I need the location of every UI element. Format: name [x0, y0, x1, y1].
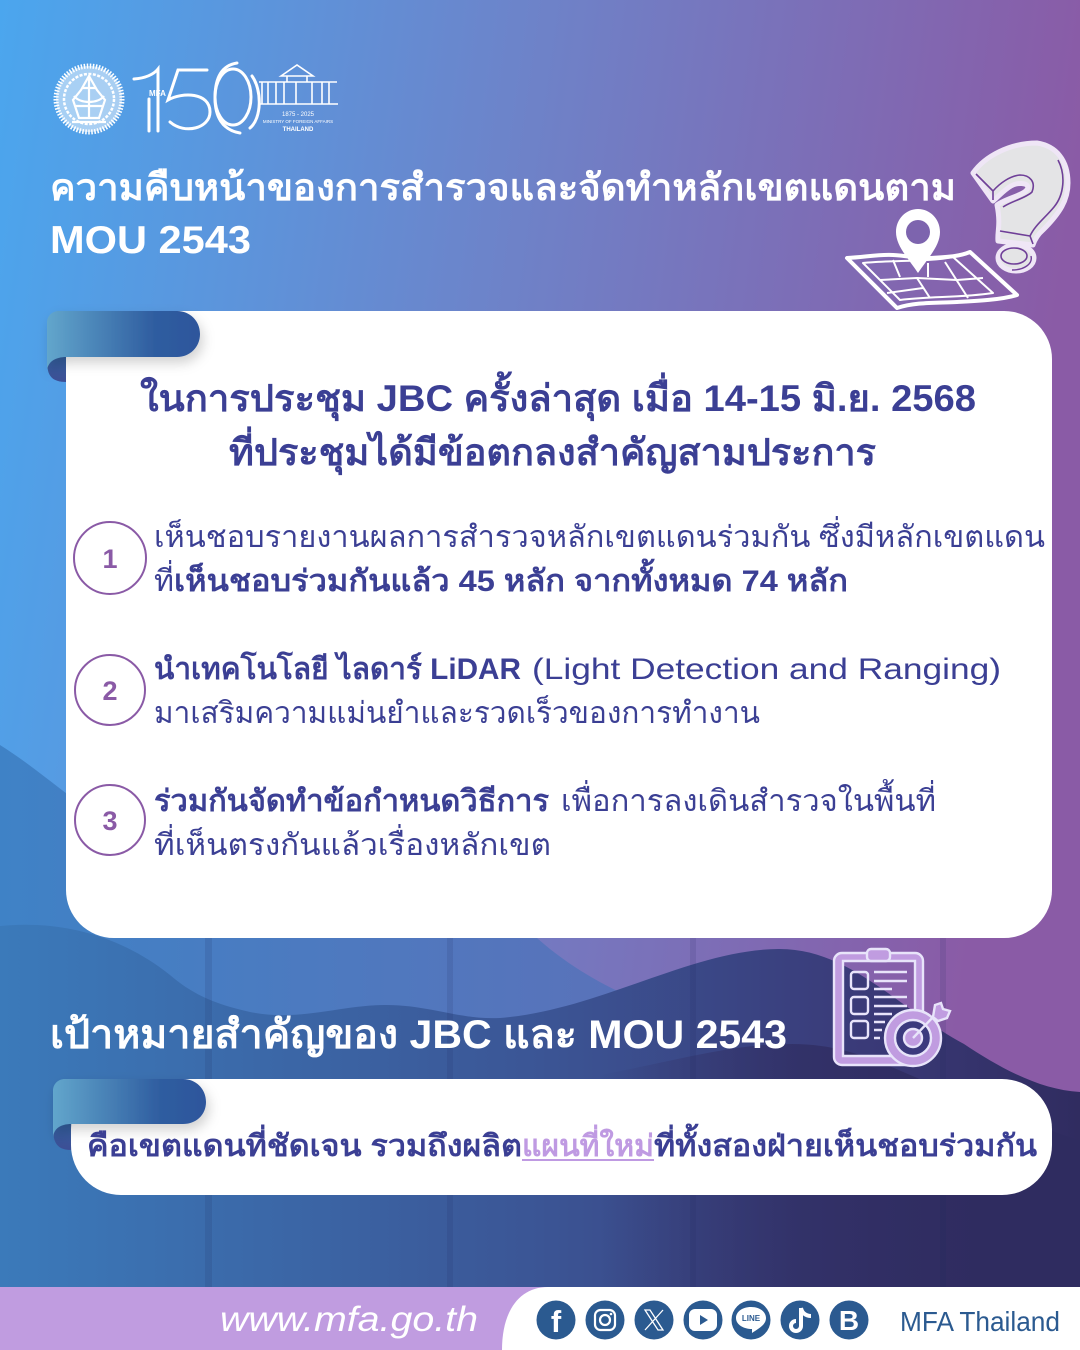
item 3 text: เพื่อการลงเดินสำรวจในพื้นที่ — [561, 779, 936, 818]
icon: clipboard with target — [834, 949, 950, 1066]
item 2 text: (Light Detection and Ranging) — [532, 653, 1001, 686]
number badge 1 — [74, 522, 146, 594]
number badge 2: 2 — [102, 676, 118, 706]
title — [50, 167, 956, 262]
number badge 2 — [75, 655, 145, 725]
item 1 text — [154, 516, 1045, 598]
number badge 3: 3 — [102, 806, 118, 836]
icon: youtube — [684, 1300, 722, 1340]
panel heading: ที่ประชุมได้มีข้อตกลงสำคัญสามประการ — [229, 426, 876, 476]
icon: line — [732, 1300, 770, 1340]
icon: X — [634, 1300, 674, 1340]
logo: MFA 150 years — [56, 63, 338, 133]
item 2 text: นำเทคโนโลยี ไลดาร์ LiDAR — [154, 650, 521, 686]
panel: JBC meeting agreements — [47, 311, 1052, 938]
logo building — [258, 65, 338, 133]
title: ความคืบหน้าของการสำรวจและจัดทำหลักเขตแดนตาม — [50, 167, 956, 208]
item 3 text: ที่เห็นตรงกันแล้วเรื่องหลักเขต — [154, 824, 551, 862]
footer bar — [0, 1287, 1080, 1350]
title: MOU 2543 — [50, 219, 251, 262]
icon: blockdit — [830, 1300, 868, 1340]
ribbon tab — [47, 311, 200, 382]
item 1 text: เห็นชอบร่วมกันแล้ว 45 หลัก จากทั้งหมด 74 หลัก — [174, 558, 848, 598]
icon: royal seal — [56, 66, 122, 132]
statement text: คือเขตแดนที่ชัดเจน รวมถึงผลิต — [87, 1124, 522, 1163]
icon: tiktok — [780, 1300, 820, 1340]
logo small MFA text: MFA — [149, 89, 166, 98]
heading: goal of JBC and MOU 2543: เป้าหมายสำคัญของ JBC และ MOU 2543 — [50, 1013, 787, 1058]
item 3 text — [154, 779, 936, 862]
logo building: 1875 - 2025 — [282, 112, 315, 118]
logo building: THAILAND — [283, 127, 314, 133]
website url: www.mfa.go.th — [220, 1300, 478, 1339]
number badge 1: 1 — [102, 544, 118, 574]
statement text — [87, 1123, 1038, 1163]
statement text: ที่ทั้งสองฝ่ายเห็นชอบร่วมกัน — [654, 1123, 1038, 1163]
item 1 text: เห็นชอบรายงานผลการสำรวจหลักเขตแดนร่วมกัน ซึ่งมีหลักเขตแดน — [154, 516, 1045, 554]
icon: line: LINE — [742, 1314, 761, 1323]
panel heading: ในการประชุม JBC ครั้งล่าสุด เมื่อ 14-15 มิ.ย. 2568 — [140, 371, 976, 422]
icon: question mark — [973, 143, 1068, 271]
item 2 text: มาเสริมความแม่นยำและรวดเร็วของการทำงาน — [154, 694, 760, 730]
brand name: MFA Thailand — [900, 1306, 1060, 1337]
panel: goal statement — [53, 1079, 1052, 1195]
icon: facebook: f — [551, 1304, 562, 1339]
background mountains — [0, 745, 1080, 1350]
item 2 — [75, 650, 1001, 730]
item 1 — [74, 516, 1045, 598]
panel background — [71, 1079, 1052, 1195]
item 3 — [75, 779, 936, 862]
logo number 150 — [134, 63, 259, 133]
logo building: MINISTRY OF FOREIGN AFFAIRS — [263, 119, 333, 124]
ribbon tab — [53, 1079, 206, 1150]
icon: blockdit: B — [839, 1305, 859, 1336]
item 1 text: ที่ — [154, 560, 174, 598]
icon: map with pin — [847, 209, 1017, 308]
item 2 text — [154, 650, 1001, 730]
panel heading — [140, 371, 976, 476]
icon: instagram — [586, 1300, 624, 1340]
icon: facebook — [536, 1300, 576, 1340]
item 3 text: ร่วมกันจัดทำข้อกำหนดวิธีการ — [154, 785, 549, 818]
panel background — [66, 311, 1052, 938]
number badge 3 — [75, 785, 145, 855]
statement text: แผนที่ใหม่ — [522, 1124, 654, 1163]
